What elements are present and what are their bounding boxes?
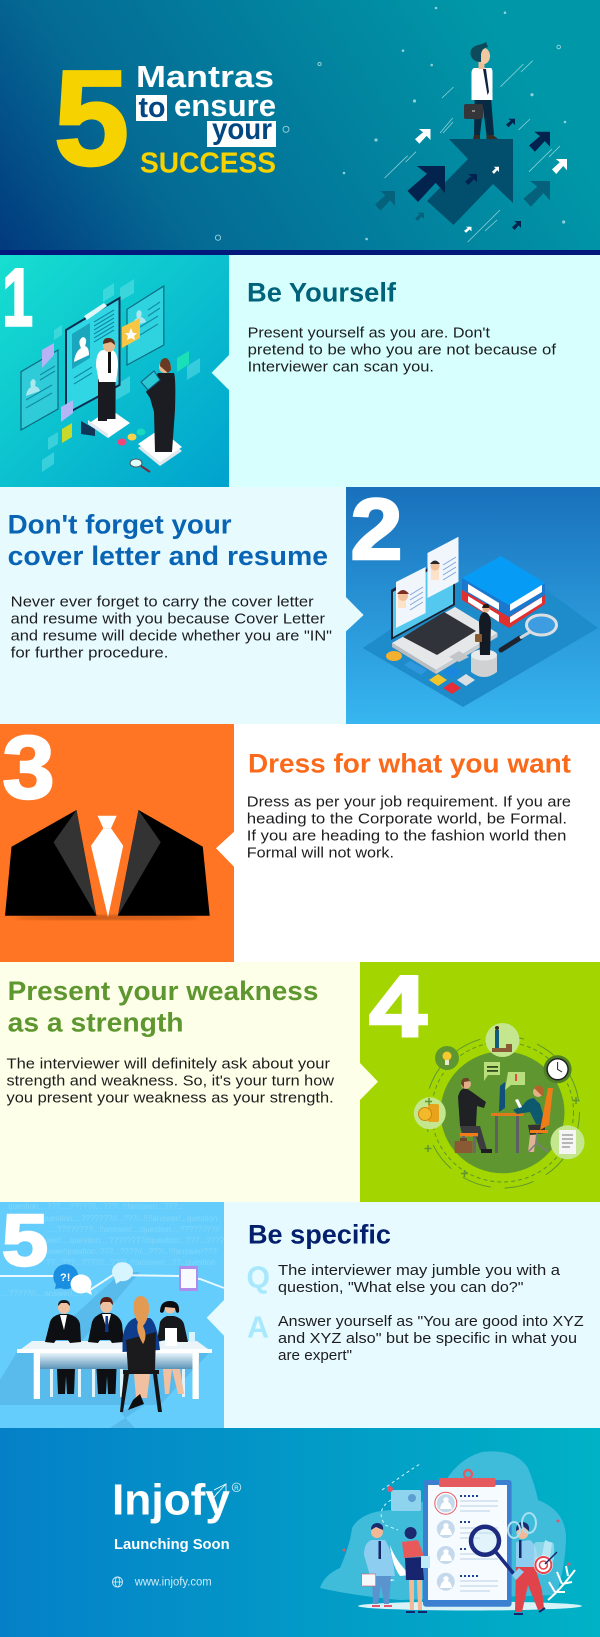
title: SUCCESS: SUCCESS	[140, 148, 276, 180]
title: Mantras: Mantras	[136, 59, 274, 94]
number 1: 1	[2, 252, 33, 344]
text: answer: are expert"	[278, 1347, 352, 1364]
heading: Don't forget your cover letter and resume: cover letter and resume	[8, 541, 328, 571]
title: to: to	[138, 92, 166, 124]
heading: Dress for what you want: Dress for what you want	[248, 749, 571, 779]
text: question: question, "What else you can do?"	[278, 1279, 524, 1296]
text: question: The interviewer may jumble you with a	[278, 1262, 561, 1279]
background pattern text: .....????????...!!answer/....question....????????//	[46, 1225, 221, 1234]
number 2: 2	[350, 482, 402, 578]
text: dress body	[247, 794, 571, 862]
background pattern text: question....???....?????//...???/..!!!answer/...???...	[8, 1202, 184, 1211]
illustration: interview panel: ?!	[60, 1272, 70, 1284]
logo: Injofy: Injofy	[112, 1475, 231, 1524]
text: Be Yourself body: Present yourself as you are. Don't	[248, 325, 491, 342]
illustration: resume clipboard team	[320, 1451, 582, 1614]
big number 5: 5	[54, 42, 129, 194]
text: dress body: Formal will not work.	[247, 845, 394, 862]
panel: mantra 2	[0, 482, 600, 724]
registered mark	[232, 1483, 241, 1492]
heading: Present your weakness as a strength: as a strength	[8, 1008, 184, 1038]
illustration: suit and tie	[5, 810, 210, 920]
text: Be Yourself body: Interviewer can scan you.	[248, 359, 434, 376]
illustration: interview panel	[0, 1262, 224, 1428]
illustration: resume review	[21, 279, 200, 472]
panel: mantra 5	[0, 1200, 600, 1428]
text: dress body: If you are heading to the fashion world then	[247, 828, 566, 845]
icon: rocket	[213, 1484, 226, 1499]
background pattern text	[0, 1202, 224, 1298]
heading: Don't forget your cover letter and resume	[8, 509, 328, 571]
letter A: A	[247, 1310, 269, 1345]
panel: mantra 3	[0, 717, 600, 962]
text: dress body: Dress as per your job requirement. If you are	[247, 794, 571, 811]
number 3: 3	[2, 717, 54, 817]
panel: mantra 4	[0, 958, 600, 1202]
background pattern text: wer/....question....????????//question...???...????	[45, 1236, 224, 1245]
background pattern text: ??...???...????//...???/..!!!answer/...??..question	[46, 1258, 215, 1267]
text: dress body: heading to the Corporate world, be Formal.	[247, 811, 567, 828]
heading: Don't forget your cover letter and resume: Don't forget your	[8, 509, 232, 539]
text: website: www.injofy.com	[134, 1577, 212, 1589]
text: weakness body: strength and weakness. So, it's your turn how	[6, 1072, 334, 1089]
illustration: laptop and resumes	[363, 537, 598, 707]
background pattern text: swer/question..???...????//...???/..!!!answer/???	[46, 1247, 217, 1256]
text: Be Yourself body: pretend to be who you are not because of	[248, 342, 557, 359]
text: answer: and XYZ also" but be specific in what you	[278, 1330, 577, 1347]
heading: Present your weakness as a strength: Present your weakness	[8, 976, 318, 1006]
text: cover letter body: Never ever forget to carry the cover letter	[11, 594, 314, 611]
number 5: 5	[2, 1200, 48, 1282]
illustration: person on rising arrows	[215, 7, 567, 242]
text: weakness body: you present your weakness as your strength.	[6, 1089, 334, 1106]
heading: Be Yourself: Be Yourself	[247, 278, 397, 308]
background pattern text: ....?????//....answer/.....???	[0, 1289, 97, 1298]
text: answer	[278, 1313, 584, 1364]
text: cover letter body: for further procedure.	[11, 645, 168, 662]
text: cover letter body: and resume with you because Cover Letter	[11, 611, 325, 628]
panel: mantra 1	[0, 252, 600, 487]
registered mark: R	[234, 1486, 239, 1492]
panel: header	[0, 0, 600, 255]
text: answer: Answer yourself as "You are good into XYZ	[278, 1313, 584, 1330]
text: Be Yourself body	[248, 325, 557, 376]
icon: globe	[112, 1577, 122, 1587]
panel: footer	[0, 1428, 600, 1637]
illustration: interview circle	[414, 1023, 584, 1188]
background pattern text: question....???????//...???/..!!!!answer/...question	[42, 1214, 217, 1223]
text: cover letter body: and resume will decide whether you are "IN"	[11, 628, 332, 645]
title: ensure: ensure	[174, 88, 276, 123]
title: your: your	[212, 113, 272, 146]
text: weakness body: The interviewer will definitely ask about your	[6, 1055, 330, 1072]
letter Q: Q	[246, 1260, 270, 1295]
text: question	[278, 1262, 561, 1296]
heading: Present your weakness as a strength	[8, 976, 318, 1038]
text: Launching Soon: Launching Soon	[114, 1536, 230, 1553]
text: weakness body	[6, 1055, 334, 1106]
number 4: 4	[369, 958, 427, 1055]
heading: Be specific: Be specific	[248, 1219, 391, 1249]
text: cover letter body	[11, 594, 332, 662]
